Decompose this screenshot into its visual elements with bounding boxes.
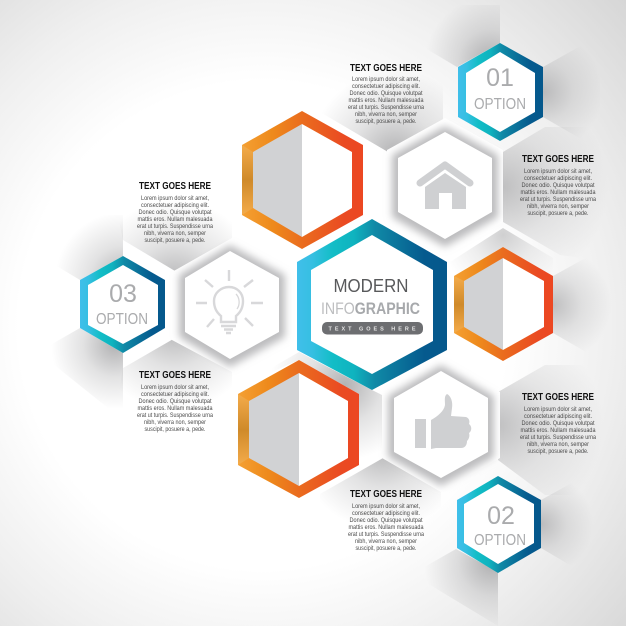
text block: upper left: TEXT GOES HERE <box>139 181 211 192</box>
text block: lower right: TEXT GOES HERE <box>522 392 594 403</box>
text block: lower left: suscipit, posuere a, pede. <box>144 427 206 433</box>
hexagon: top orange <box>242 111 363 249</box>
text block: top: erat ut turpis. Suspendisse urna <box>348 105 425 111</box>
text block: upper right: Donec odio. Quisque volutpat <box>522 183 595 189</box>
icon: lightbulb <box>196 270 263 333</box>
text block: upper right: nibh, viverra non, semper <box>527 204 589 210</box>
text block: lower right: erat ut turpis. Suspendisse urna <box>520 435 597 441</box>
text block: lower left: mattis eros. Nullam malesuada <box>138 406 213 412</box>
text block: top <box>348 63 425 125</box>
text block: lower right: suscipit, posuere a, pede. <box>528 449 589 455</box>
text block: top: suscipit, posuere a, pede. <box>356 119 417 125</box>
subtitle pill: TEXT GOES HERE <box>328 326 416 332</box>
text block: upper left: erat ut turpis. Suspendisse urna <box>137 224 214 230</box>
text block: lower right: mattis eros. Nullam malesuada <box>520 428 596 434</box>
hexagon: thumbs-up tile <box>382 358 500 492</box>
title: infographic: INFOGRAPHIC <box>321 299 420 318</box>
text block: bottom: TEXT GOES HERE <box>350 489 422 500</box>
text block: top: consectetuer adipiscing elit. <box>352 84 420 90</box>
text block: bottom: mattis eros. Nullam malesuada <box>348 525 424 531</box>
text block: lower right: nibh, viverra non, semper <box>527 442 589 448</box>
option 02 hexagon: 02 <box>487 502 515 530</box>
text block: upper left: mattis eros. Nullam malesuada <box>138 217 213 223</box>
hexagon: right orange <box>454 247 553 361</box>
text block: lower left: consectetuer adipiscing elit. <box>141 392 209 398</box>
text block: lower left: erat ut turpis. Suspendisse urna <box>137 413 214 419</box>
icon: thumbs up <box>415 394 471 449</box>
option 01 hexagon: OPTION <box>474 96 526 113</box>
text block: upper left: Lorem ipsum dolor sit amet, <box>141 196 209 202</box>
text block: lower left <box>137 370 214 433</box>
text block: upper right: consectetuer adipiscing elit. <box>524 176 592 182</box>
text block: top: TEXT GOES HERE <box>350 63 422 74</box>
text block: lower right: Donec odio. Quisque volutpat <box>522 421 595 427</box>
option 01 hexagon <box>458 43 543 141</box>
text block: lower left: Donec odio. Quisque volutpat <box>138 399 212 405</box>
text block: lower right: consectetuer adipiscing elit. <box>524 414 592 420</box>
option 03 hexagon: OPTION <box>96 311 148 328</box>
text block: top: nibh, viverra non, semper <box>355 112 417 118</box>
option 02 hexagon <box>457 476 541 573</box>
text block: upper left: consectetuer adipiscing elit. <box>141 203 209 209</box>
text block: lower left: nibh, viverra non, semper <box>144 420 206 426</box>
text block: upper left <box>137 181 214 244</box>
text block: upper right: mattis eros. Nullam malesuada <box>520 190 596 196</box>
text block: bottom: suscipit, posuere a, pede. <box>356 546 417 552</box>
text block: bottom: consectetuer adipiscing elit. <box>352 511 420 517</box>
text block: upper left: nibh, viverra non, semper <box>144 231 206 237</box>
option 03 hexagon: 03 <box>109 280 137 308</box>
option 03 hexagon <box>80 256 165 353</box>
text block: top: Lorem ipsum dolor sit amet, <box>352 77 420 83</box>
text block: bottom: nibh, viverra non, semper <box>355 539 417 545</box>
text block: upper right: TEXT GOES HERE <box>522 154 594 165</box>
text block: bottom: Donec odio. Quisque volutpat <box>350 518 423 524</box>
text block: lower right <box>520 392 597 455</box>
text block: top: Donec odio. Quisque volutpat <box>350 91 423 97</box>
icon: house <box>420 165 470 209</box>
text block: bottom <box>348 489 425 552</box>
hexagon: bottom orange <box>238 360 359 498</box>
subtitle pill <box>322 322 423 334</box>
text block: lower right: Lorem ipsum dolor sit amet, <box>524 407 592 413</box>
text block: lower left: TEXT GOES HERE <box>139 370 211 381</box>
hexagon: central title <box>297 219 447 390</box>
text block: upper right <box>520 154 597 217</box>
hexagon: house tile <box>387 118 503 255</box>
text block: upper left: suscipit, posuere a, pede. <box>144 238 206 244</box>
text block: bottom: Lorem ipsum dolor sit amet, <box>352 504 420 510</box>
text block: lower left: Lorem ipsum dolor sit amet, <box>141 385 209 391</box>
hexagon: lightbulb tile <box>172 238 292 372</box>
text block: upper right: suscipit, posuere a, pede. <box>528 211 589 217</box>
text block: upper left: Donec odio. Quisque volutpat <box>138 210 212 216</box>
title: modern: MODERN <box>334 275 408 296</box>
text block: upper right: Lorem ipsum dolor sit amet, <box>524 169 592 175</box>
text block: top: mattis eros. Nullam malesuada <box>348 98 424 104</box>
option 02 hexagon: OPTION <box>474 532 526 549</box>
option 01 hexagon: 01 <box>486 64 514 92</box>
text block: upper right: erat ut turpis. Suspendisse urna <box>520 197 597 203</box>
text block: bottom: erat ut turpis. Suspendisse urna <box>348 532 425 538</box>
